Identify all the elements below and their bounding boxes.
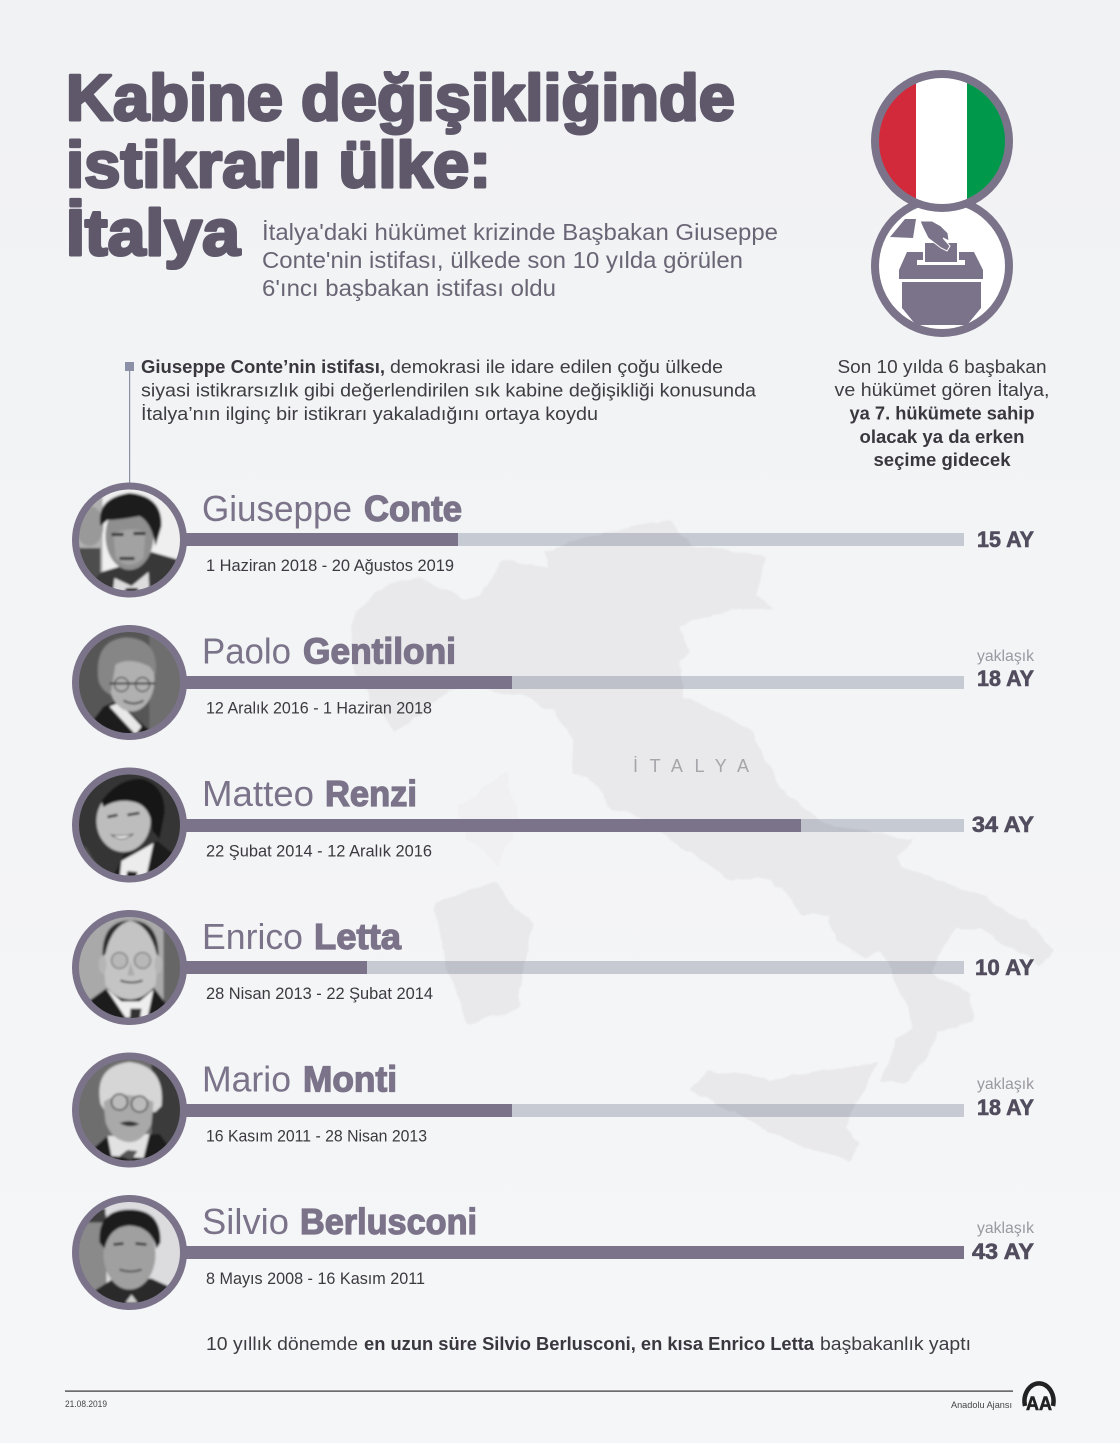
bar: Gentiloni 18 months (180, 676, 964, 689)
value: yaklaşık 18 AY: yaklaşık (977, 1076, 1035, 1093)
value: 15 AY: 15 AY (977, 527, 1034, 552)
value: yaklaşık 43 AY: 43 AY (972, 1239, 1034, 1264)
icon: AA logo: AA (1026, 1394, 1052, 1415)
intro text: Giuseppe Conte’nin istifası, (141, 356, 385, 377)
bar: Renzi 34 months (180, 819, 964, 832)
dates: Conte: 1 Haziran 2018 - 20 Ağustos 2019 (206, 557, 454, 575)
row: Silvio Berlusconi (74, 1198, 1035, 1308)
name: Enrico Letta: Enrico (202, 916, 303, 957)
footer (65, 1383, 1054, 1415)
name: Enrico Letta: Letta (314, 916, 402, 957)
portrait: Gentiloni (74, 628, 184, 738)
subtitle: 6'ıncı başbakan istifası oldu (262, 275, 556, 301)
bar: Berlusconi 43 months (180, 1246, 964, 1259)
title (66, 61, 735, 269)
intro connector line (125, 362, 134, 483)
name: Enrico Letta (202, 916, 402, 957)
map: Sardinia (433, 882, 532, 1025)
dates: Monti: 16 Kasım 2011 - 28 Nisan 2013 (206, 1128, 427, 1146)
value: yaklaşık 18 AY: yaklaşık (977, 648, 1035, 665)
name: Mario Monti: Monti (303, 1058, 397, 1100)
subtitle: Conte'nin istifası, ülkede son 10 yılda görülen (262, 247, 743, 273)
portrait: Conte (74, 485, 184, 595)
bar: Monti 18 months (180, 1104, 964, 1117)
title: istikrarlı ülke: (66, 128, 491, 201)
name: Silvio Berlusconi: Berlusconi (300, 1201, 477, 1242)
name: Matteo Renzi (202, 773, 417, 814)
name: Giuseppe Conte: Giuseppe (202, 488, 352, 529)
side note: ve hükümet gören İtalya, (834, 379, 1050, 400)
subtitle: İtalya'daki hükümet krizinde Başbakan Giuseppe (262, 219, 778, 245)
title: İtalya (66, 196, 241, 269)
icon: Italian flag circle (872, 74, 1009, 208)
value: yaklaşık 18 AY: 18 AY (977, 666, 1034, 691)
name: Matteo Renzi: Matteo (202, 773, 314, 814)
map: mainland (350, 522, 1054, 1083)
dates: Berlusconi: 8 Mayıs 2008 - 16 Kasım 2011 (206, 1270, 425, 1288)
intro text: İtalya’nın ilginç bir istikrarı yakaladığını ortaya koydu (141, 403, 598, 424)
map of Italy (350, 522, 1054, 1161)
intro text: demokrasi ile idare edilen çoğu ülkede (390, 356, 723, 377)
value: 10 AY: 10 AY (975, 955, 1034, 980)
name: Matteo Renzi: Renzi (325, 773, 417, 814)
dates: Letta: 28 Nisan 2013 - 22 Şubat 2014 (206, 985, 433, 1003)
row: Giuseppe Conte (74, 485, 1034, 595)
name: Giuseppe Conte: Conte (364, 488, 462, 529)
name: Giuseppe Conte (202, 488, 462, 529)
value: 34 AY: 34 AY (972, 812, 1034, 837)
side note: seçime gidecek (874, 449, 1011, 470)
name: Paolo Gentiloni: Paolo (202, 630, 291, 672)
name: Mario Monti (202, 1058, 397, 1100)
side note (834, 356, 1050, 470)
row: Matteo Renzi (74, 770, 1034, 880)
icon: ballot box circle (875, 199, 1009, 333)
side note: Son 10 yılda 6 başbakan (838, 356, 1046, 377)
summary sentence: başbakanlık yaptı (820, 1333, 971, 1354)
row: Enrico Letta (74, 912, 1034, 1022)
intro text: siyasi istikrarsızlık gibi değerlendirilen sık kabine değişikliği konusunda (141, 380, 757, 400)
bar: Conte 15 months (180, 533, 964, 546)
name: Paolo Gentiloni: Gentiloni (303, 630, 456, 672)
dates: Gentiloni: 12 Aralık 2016 - 1 Haziran 2018 (206, 700, 432, 718)
value: yaklaşık 43 AY: yaklaşık (977, 1220, 1035, 1237)
title: Kabine değişikliğinde (66, 61, 735, 134)
icon: AA logo (1024, 1383, 1054, 1415)
summary sentence: en uzun süre Silvio Berlusconi, en kısa Enrico Letta (364, 1333, 815, 1354)
value: yaklaşık 18 AY (977, 1076, 1035, 1120)
value: yaklaşık 18 AY: 18 AY (977, 1095, 1034, 1120)
side note: ya 7. hükümete sahip (850, 402, 1034, 424)
name: Mario Monti: Mario (202, 1058, 291, 1100)
summary sentence (206, 1333, 971, 1354)
name: Silvio Berlusconi: Silvio (202, 1201, 289, 1242)
name: Silvio Berlusconi (202, 1201, 477, 1242)
map: Sicily (690, 1062, 880, 1161)
side note: olacak ya da erken (860, 426, 1024, 447)
map label: İtalya: İTALYA (633, 756, 749, 776)
portrait: Mario Monti (74, 1055, 184, 1165)
value: yaklaşık 43 AY (972, 1220, 1035, 1264)
footer date: 21.08.2019 (65, 1399, 107, 1410)
footer credit: Anadolu Ajansı (951, 1400, 1012, 1411)
dates: Renzi: 22 Şubat 2014 - 12 Aralık 2016 (206, 842, 432, 860)
intro text (141, 356, 757, 424)
name: Paolo Gentiloni (202, 630, 456, 672)
value: yaklaşık 18 AY (977, 648, 1035, 691)
portrait: Enrico Letta (74, 912, 184, 1022)
portrait: Renzi (74, 770, 184, 880)
map: Corsica (458, 772, 518, 866)
summary sentence: 10 yıllık dönemde (206, 1333, 358, 1354)
subtitle (262, 219, 778, 301)
row: Paolo Gentiloni (74, 628, 1035, 738)
portrait: Silvio Berlusconi (74, 1198, 184, 1308)
row: Mario Monti (74, 1055, 1035, 1165)
bar: Letta 10 months (180, 961, 964, 974)
